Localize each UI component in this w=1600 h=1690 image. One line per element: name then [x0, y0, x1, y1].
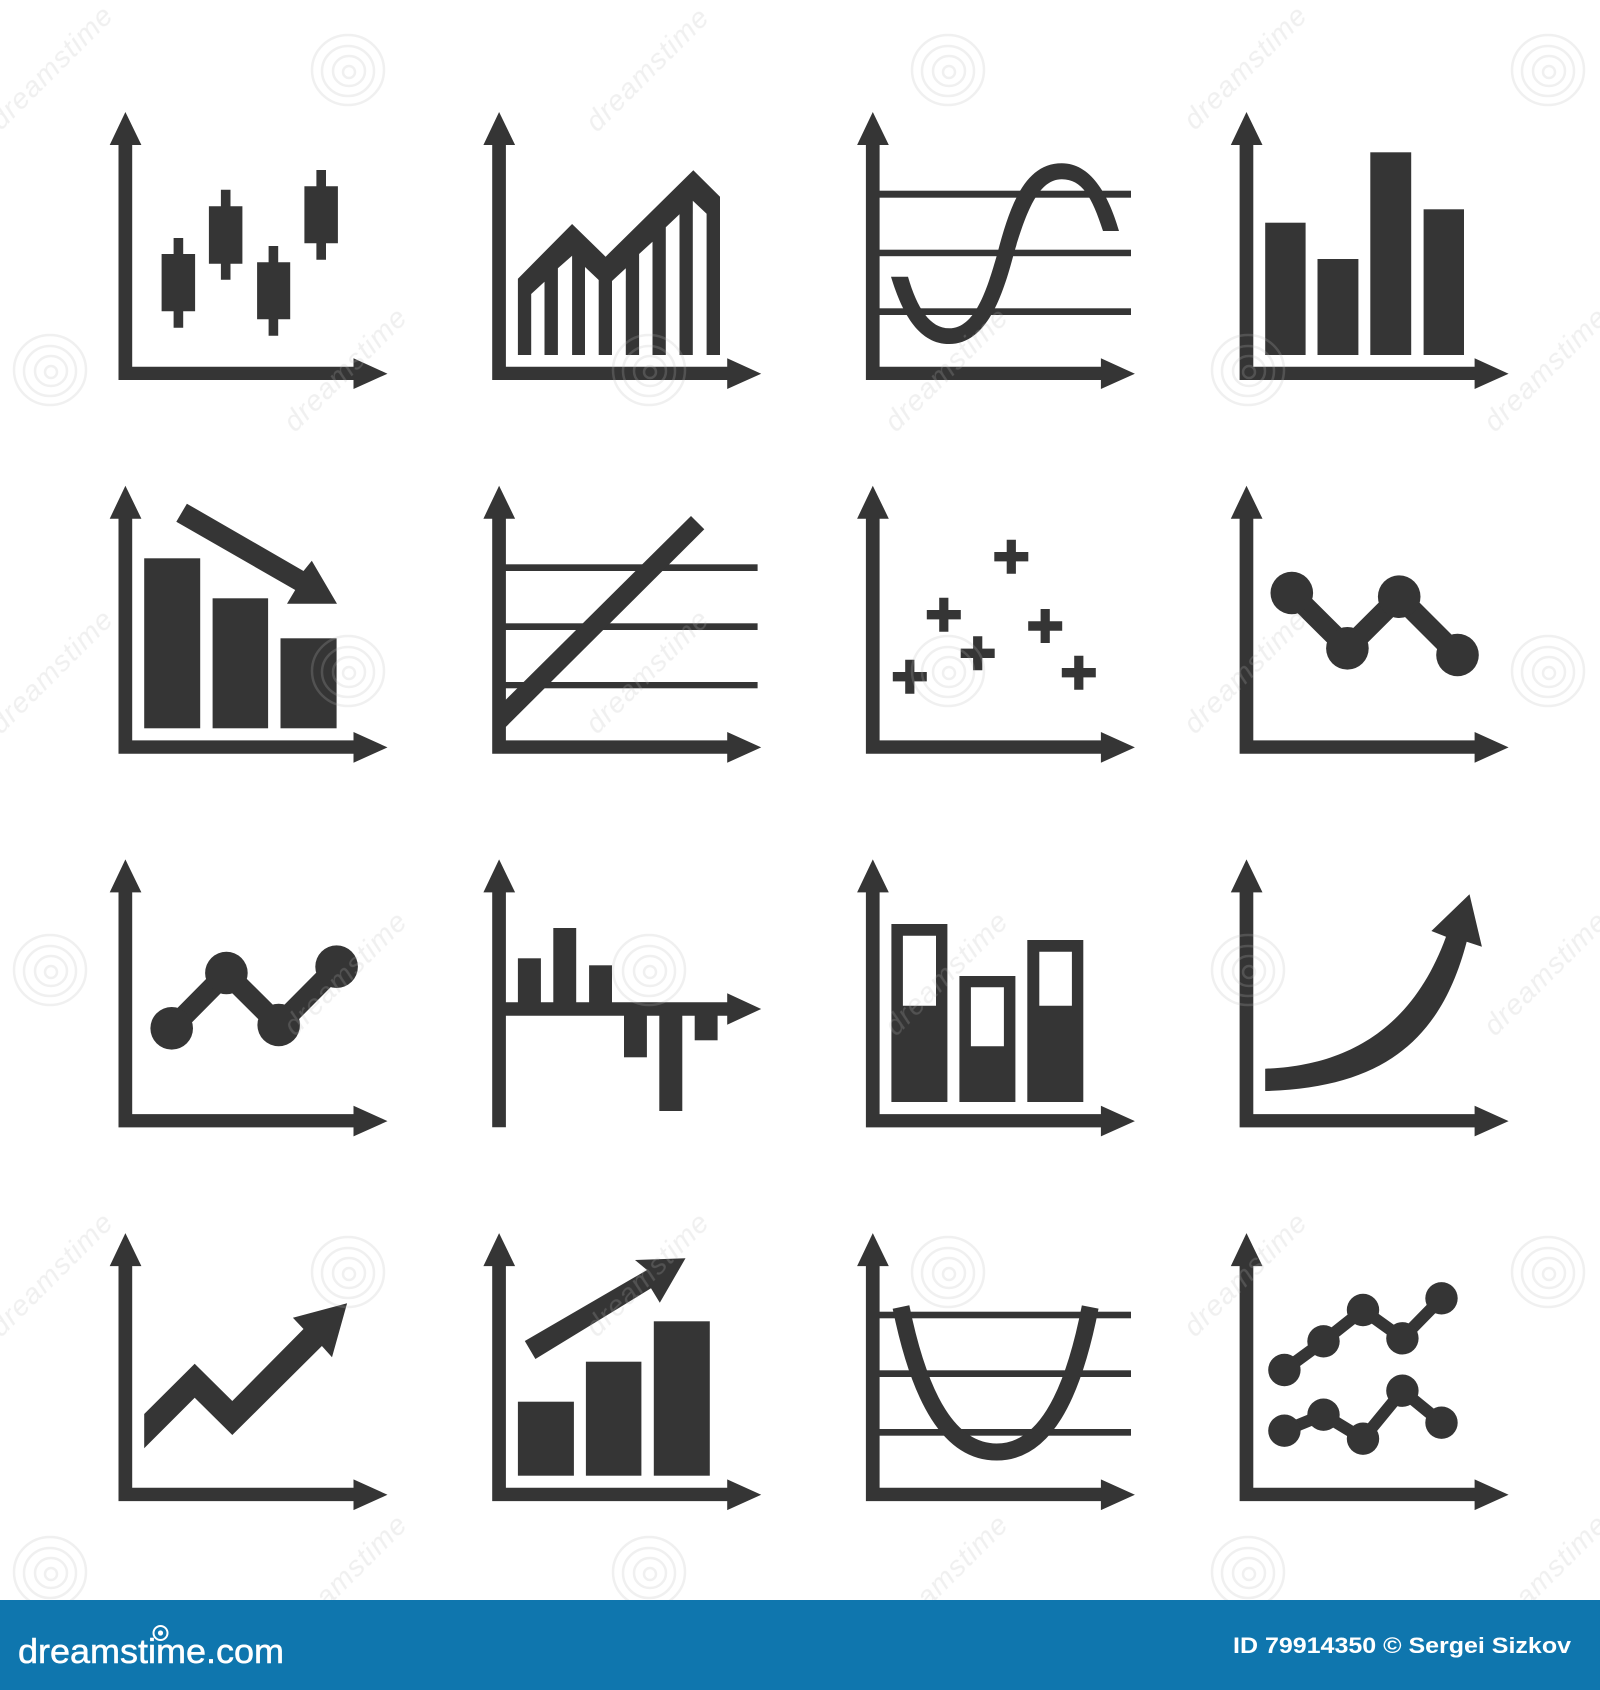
watermark pattern: dreamstime: [579, 603, 716, 740]
watermark pattern: dreamstime: [579, 1, 716, 138]
icon: zigzag rising arrow: [110, 1233, 387, 1510]
icon: rising dot line chart: [110, 859, 387, 1136]
icon: falling dot line chart: [1231, 486, 1509, 763]
icon: scatter plot: [857, 486, 1135, 763]
icon: candlestick chart: [110, 112, 387, 389]
icon: parabola chart: [857, 1233, 1135, 1510]
icon: exponential growth arrow: [1231, 859, 1509, 1136]
footer band: [0, 1600, 1600, 1690]
watermark pattern: dreamstime: [277, 301, 414, 438]
watermark pattern: dreamstime: [277, 1508, 414, 1645]
watermark pattern: dreamstime: [579, 1206, 716, 1343]
icon: positive and negative bar chart: [483, 859, 761, 1127]
watermark pattern: dreamstime: [277, 905, 414, 1042]
image id and credit: ID 79914350 © Sergei Sizkov: [1233, 1633, 1572, 1658]
icon: rising bars with up arrow: [483, 1233, 761, 1510]
watermark pattern: dreamstime: [878, 905, 1015, 1042]
watermark pattern: dreamstime: [1177, 0, 1314, 136]
icon: striped area chart: [483, 112, 761, 389]
icon: bar chart: [1231, 112, 1509, 389]
logo: dreamstime.com: dreamstime.com: [18, 1633, 284, 1671]
watermark pattern: dreamstime: [1177, 1206, 1314, 1343]
watermark pattern: dreamstime: [878, 301, 1015, 438]
icon: diagonal line chart: [483, 486, 761, 763]
icon: falling bars with down arrow: [110, 486, 387, 763]
watermark pattern: dreamstime: [878, 1508, 1015, 1645]
icon: stacked bar chart with hollow tops: [857, 859, 1135, 1136]
icon: sine wave chart: [857, 112, 1135, 389]
icon: two dot line series: [1231, 1233, 1509, 1510]
watermark pattern: dreamstime: [1177, 603, 1314, 740]
